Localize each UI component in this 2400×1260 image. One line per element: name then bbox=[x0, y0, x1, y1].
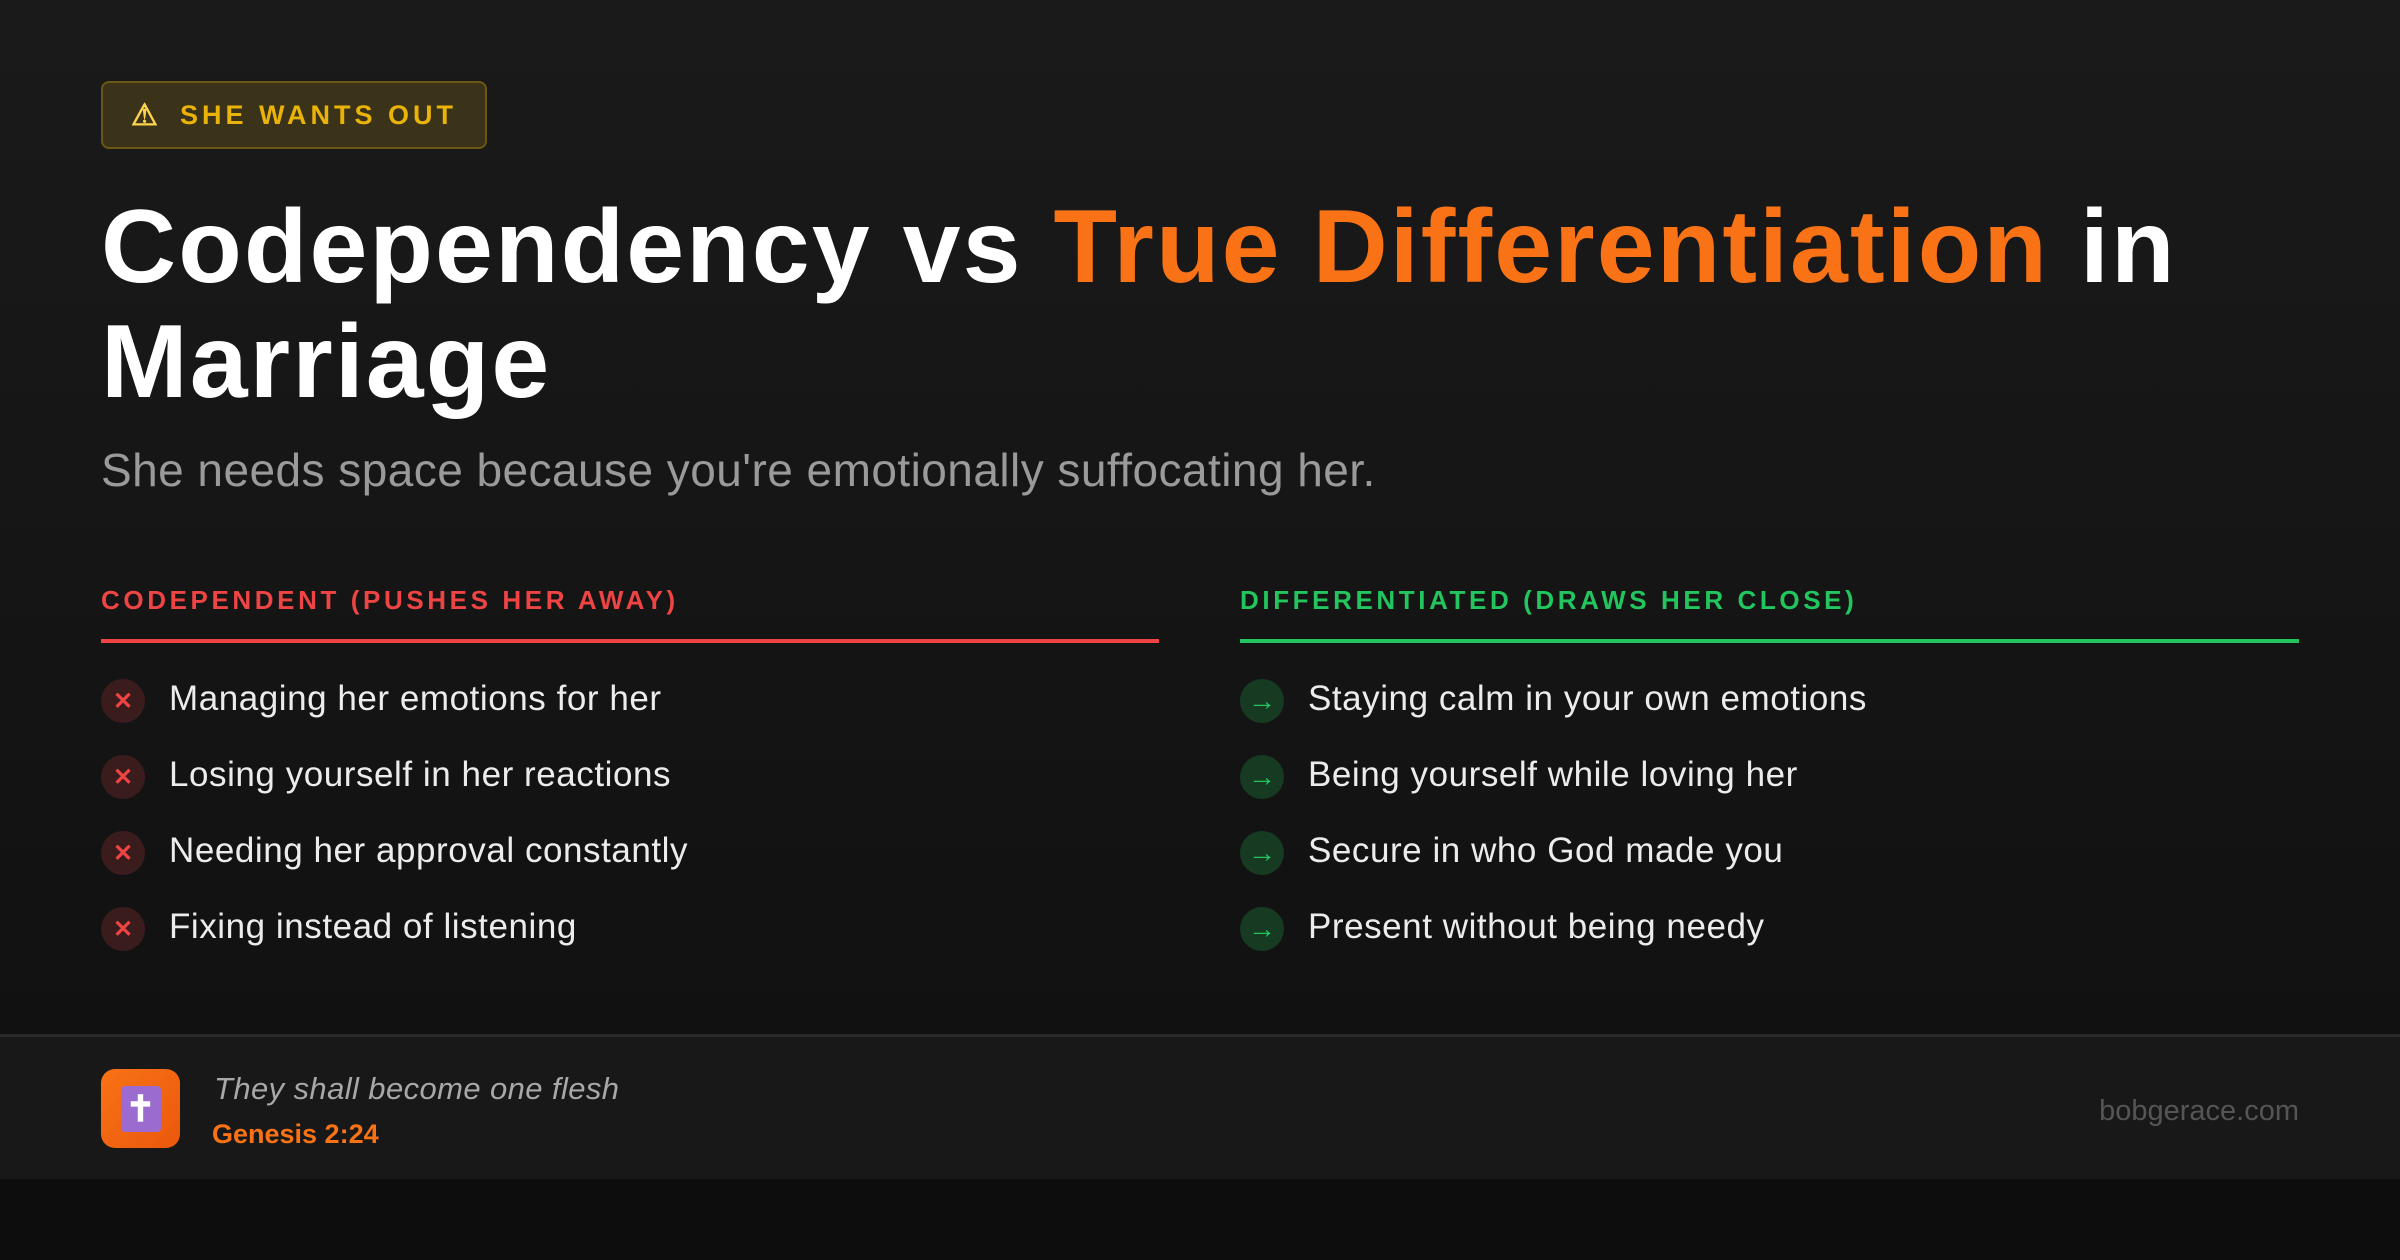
list: codependent items: Managing her emotions for her bbox=[169, 679, 662, 718]
footer bbox=[0, 1034, 2400, 1179]
icon: cross bbox=[101, 1069, 180, 1148]
list: differentiated items: Being yourself while loving her bbox=[1308, 755, 1798, 794]
heading: differentiated: DIFFERENTIATED (DRAWS HER CLOSE) bbox=[1240, 585, 1857, 615]
list: codependent items: ✕ bbox=[113, 764, 133, 790]
list: differentiated items bbox=[1240, 679, 1867, 951]
quote: They shall become one flesh bbox=[214, 1071, 619, 1106]
badge: SHE WANTS OUT bbox=[180, 100, 457, 130]
badge bbox=[101, 81, 487, 149]
badge: ⚠ bbox=[131, 98, 162, 132]
list: differentiated items: Secure in who God made you bbox=[1308, 831, 1783, 870]
list: differentiated items: → bbox=[1248, 685, 1276, 716]
list: codependent items: ✕ bbox=[113, 916, 133, 942]
icon: cross: ✝ bbox=[125, 1088, 156, 1128]
list: differentiated items: Staying calm in your own emotions bbox=[1308, 679, 1867, 718]
list: codependent items: ✕ bbox=[113, 688, 133, 714]
title: Codependency vs True Differentiation in Marriage bbox=[101, 189, 2177, 420]
panel: differentiated bbox=[1240, 585, 2299, 951]
list: differentiated items: → bbox=[1248, 837, 1276, 868]
panel: codependent bbox=[101, 585, 1159, 951]
heading: codependent: CODEPENDENT (PUSHES HER AWAY) bbox=[101, 585, 679, 615]
list: differentiated items: Present without being needy bbox=[1308, 907, 1765, 946]
list: codependent items: ✕ bbox=[113, 840, 133, 866]
subtitle: She needs space because you're emotionally suffocating her. bbox=[101, 444, 1376, 496]
list: codependent items bbox=[101, 679, 688, 951]
site url: bobgerace.com bbox=[2099, 1095, 2299, 1127]
list: codependent items: Fixing instead of listening bbox=[169, 907, 577, 946]
list: codependent items: Needing her approval constantly bbox=[169, 831, 688, 870]
reference: Genesis 2:24 bbox=[212, 1119, 379, 1149]
list: differentiated items: → bbox=[1248, 761, 1276, 792]
list: differentiated items: → bbox=[1248, 913, 1276, 944]
list: codependent items: Losing yourself in her reactions bbox=[169, 755, 671, 794]
